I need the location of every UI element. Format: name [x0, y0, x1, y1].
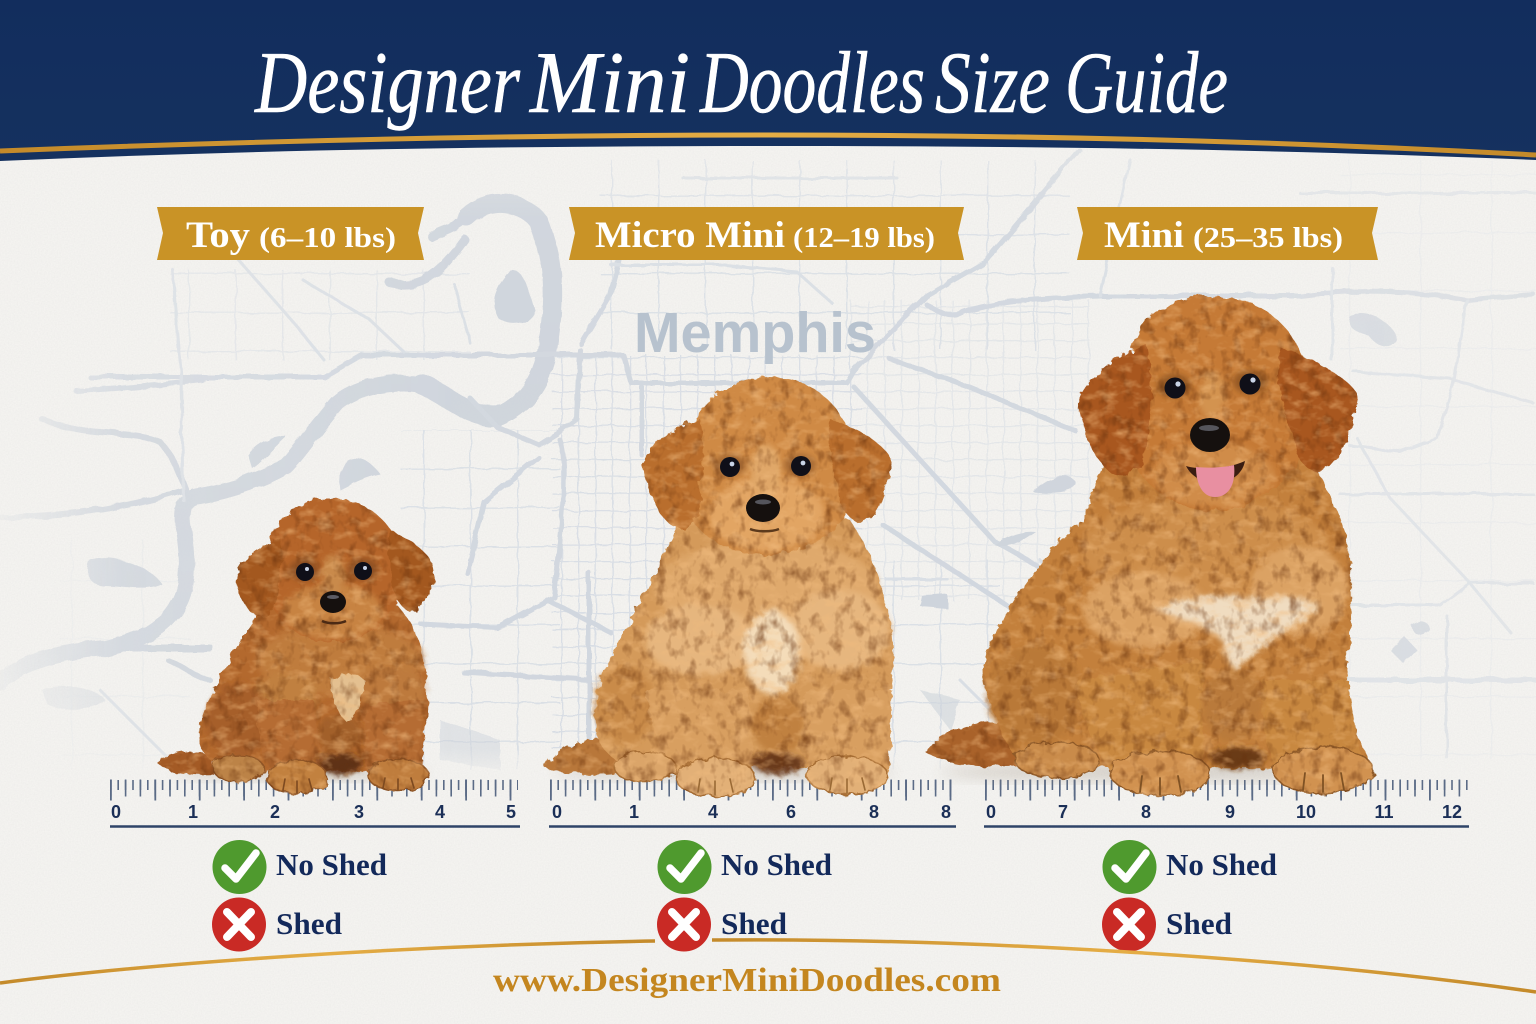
- puppy: Mini: [925, 296, 1373, 795]
- ruler: Toy: 0: [111, 802, 121, 822]
- ruler: Mini: 11: [1374, 802, 1394, 822]
- ruler: Micro Mini: 6: [786, 802, 796, 822]
- toes: [698, 778, 865, 795]
- ruler: Micro Mini: 1: [629, 802, 639, 822]
- icon: check: [658, 840, 712, 894]
- ruler: Mini: 9: [1225, 802, 1235, 822]
- ruler: Mini: 7: [1058, 802, 1068, 822]
- ribbon: Toy: [157, 207, 424, 260]
- icon: cross: [657, 898, 711, 952]
- ribbon: Micro Mini: (12–19 lbs): [793, 222, 935, 254]
- status: Mini: No Shed: [1166, 847, 1277, 882]
- gold header stripe: [0, 135, 1536, 155]
- faded Memphis street map: [0, 150, 1536, 770]
- ribbon: Mini: (25–35 lbs): [1193, 222, 1343, 254]
- ruler: Toy: 1: [188, 802, 198, 822]
- icon: check: [1102, 840, 1156, 894]
- puppy: Toy: [157, 498, 435, 794]
- ribbon: Micro Mini: Micro Mini: [595, 215, 785, 256]
- status: Micro Mini: [657, 840, 832, 952]
- ruler: Toy: 3: [354, 802, 364, 822]
- face: [289, 558, 378, 623]
- website URL: www.DesignerMiniDoodles.com: [493, 962, 1001, 999]
- header band: [0, 0, 1536, 161]
- title: [254, 35, 1228, 132]
- ribbon: Micro Mini: [569, 207, 964, 260]
- title: Doodles: [699, 35, 925, 132]
- toes: [283, 778, 414, 793]
- title: Guide: [1065, 35, 1228, 132]
- face: [1157, 370, 1267, 497]
- ribbon: Mini: Mini: [1104, 215, 1184, 256]
- ruler: Mini: 8: [1141, 802, 1151, 822]
- ruler: Toy: 5: [506, 802, 516, 822]
- ruler: Toy: 2: [270, 802, 280, 822]
- title: Size: [935, 35, 1050, 132]
- toes: [1140, 773, 1344, 795]
- status: Toy: [212, 840, 387, 952]
- puppy: Micro Mini: [545, 377, 895, 796]
- ruler: Micro Mini: 4: [708, 802, 718, 822]
- street grids: [170, 159, 1366, 769]
- main roads: [76, 150, 1533, 760]
- Memphis map label: Memphis: [634, 301, 876, 365]
- title: Designer: [254, 35, 521, 132]
- ruler: Micro Mini: 0: [552, 802, 562, 822]
- ruler: Micro Mini: 8: [941, 802, 951, 822]
- face: [714, 454, 816, 531]
- river: [0, 203, 553, 682]
- ruler: Mini: 0: [986, 802, 996, 822]
- ruler: Toy: 4: [435, 802, 445, 822]
- footer gold arc: [0, 940, 1536, 992]
- ruler: Micro Mini: 8: [869, 802, 879, 822]
- title: Mini: [528, 35, 690, 132]
- status: Mini: [1102, 840, 1277, 952]
- status: Toy: No Shed: [276, 847, 387, 882]
- ruler: Toy: [110, 785, 520, 826]
- icon: cross: [212, 898, 266, 952]
- ruler: Mini: 10: [1296, 802, 1316, 822]
- ribbon: Toy: (6–10 lbs): [259, 222, 396, 254]
- ribbon: Toy: Toy: [186, 215, 251, 256]
- ruler: Micro Mini: [549, 785, 956, 826]
- status: Micro Mini: No Shed: [721, 847, 832, 882]
- ribbon: Mini: [1077, 207, 1378, 260]
- icon: cross: [1102, 898, 1156, 952]
- status: Micro Mini: Shed: [721, 906, 787, 941]
- lakes: [42, 270, 1430, 770]
- status: Toy: Shed: [276, 906, 342, 941]
- ruler: Mini: [984, 785, 1469, 826]
- status: Mini: Shed: [1166, 906, 1232, 941]
- ruler: Mini: 12: [1442, 802, 1462, 822]
- icon: check: [212, 840, 266, 894]
